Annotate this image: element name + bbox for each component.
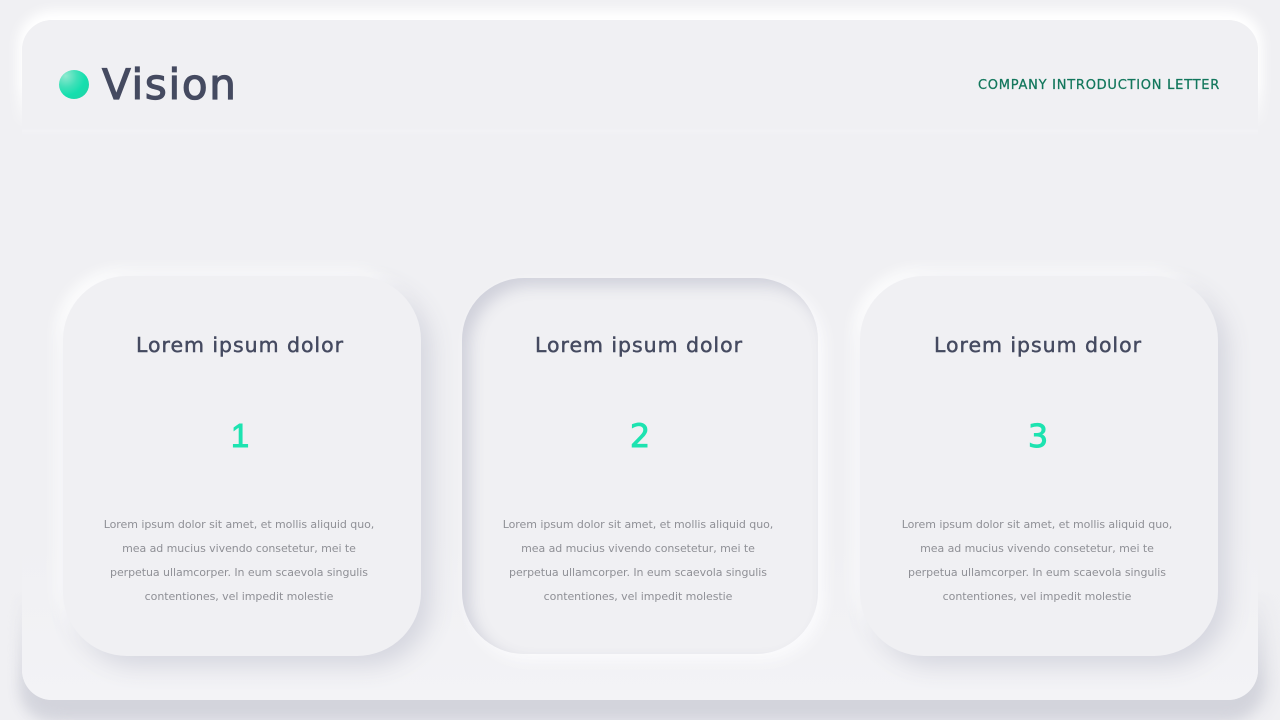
number: card 1: 1 [231,417,249,454]
text block: card 3: perpetua ullamcorper. In eum scaevola singulis [908,566,1166,579]
panel: card 3 [859,275,1235,673]
text block: card 2: contentiones, vel impedit molestie [544,590,732,603]
title: Vision [102,60,238,109]
icon: green title dot [59,70,89,99]
panel: card 2 (inset) [462,278,820,654]
text block: card 1 [104,518,374,603]
text block: card 1: Lorem ipsum dolor sit amet, et mollis aliquid quo, [104,518,374,531]
text block: card 1: mea ad mucius vivendo consetetur, mei te [122,542,356,555]
heading: card 1: Lorem ipsum dolor [136,333,344,357]
text block: card 1: contentiones, vel impedit molestie [145,590,333,603]
text block: card 2: Lorem ipsum dolor sit amet, et mollis aliquid quo, [503,518,773,531]
number: card 2: 2 [630,417,650,455]
heading: card 2: Lorem ipsum dolor [535,333,743,357]
text block: card 1: perpetua ullamcorper. In eum scaevola singulis [110,566,368,579]
text block: card 3: Lorem ipsum dolor sit amet, et mollis aliquid quo, [902,518,1172,531]
heading: card 3: Lorem ipsum dolor [934,333,1142,357]
panel: card 1 [62,275,437,673]
header label: COMPANY INTRODUCTION LETTER [978,78,1220,93]
text block: card 2: perpetua ullamcorper. In eum scaevola singulis [509,566,767,579]
text block: card 2: mea ad mucius vivendo consetetur, mei te [521,542,755,555]
text block: card 2 [503,518,773,603]
text block: card 3: contentiones, vel impedit molestie [943,590,1131,603]
number: card 3: 3 [1028,417,1048,455]
text block: card 3 [902,518,1172,603]
text block: card 3: mea ad mucius vivendo consetetur, mei te [920,542,1154,555]
